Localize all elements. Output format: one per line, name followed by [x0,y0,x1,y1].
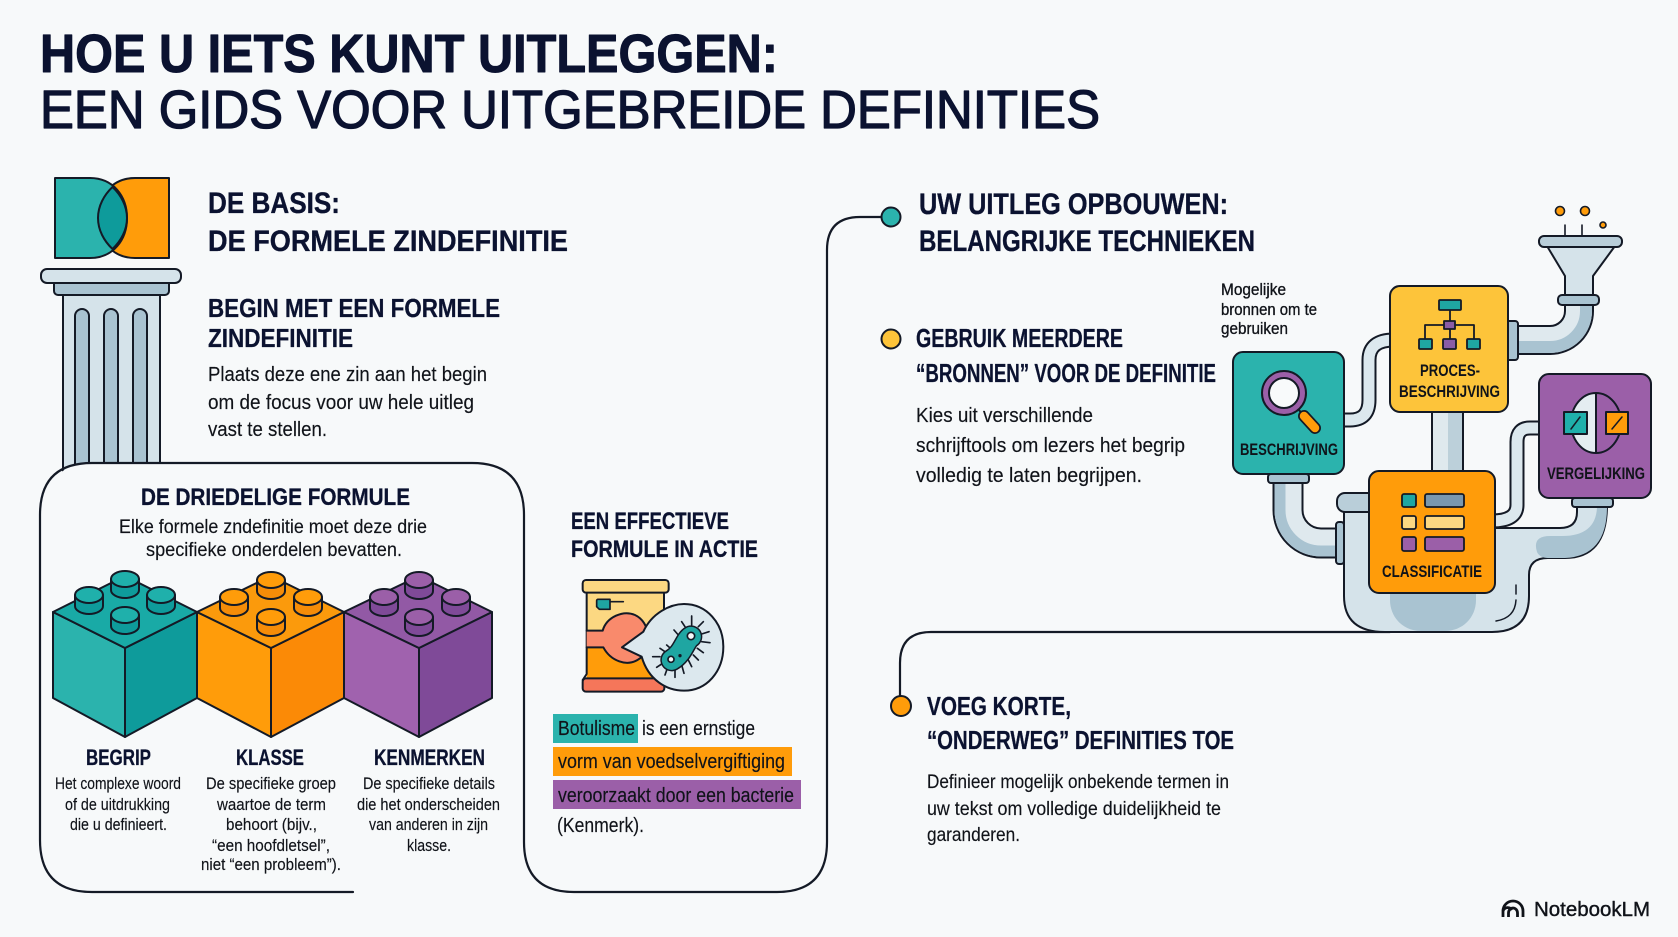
highlighted sentence: is een ernstige [642,717,755,740]
pipe: comparison to classification [1492,428,1542,521]
annotation: mogelijke bronnen [1221,281,1317,338]
icon: orange brick [197,572,344,737]
marker: orange dot [891,696,911,716]
text block: begin met een formele zindefinitie: om de focus voor uw hele uitleg [208,391,474,414]
heading: de driedelige formule: DE DRIEDELIGE FORMULE [141,484,410,511]
icon: purple brick [344,572,492,737]
text block: begin met een formele zindefinitie: Plaats deze ene zin aan het begin [208,363,487,386]
panel outline: connector line around formula panels [40,217,882,892]
box: classificatie [1369,471,1495,593]
box: beschrijving [1233,352,1344,474]
icon: column [41,269,181,480]
box: procesbeschrijving: PROCES- [1420,362,1480,380]
highlighted sentence [553,714,801,837]
marker: yellow dot [882,330,900,348]
pipe: description to process [1340,340,1394,420]
highlight: begrip: Botulisme [558,717,635,740]
title [40,24,1100,140]
annotation: mogelijke bronnen: Mogelijke [1221,281,1286,299]
icon: flowchart [1419,300,1480,349]
text block: formula intro: Elke formele zndefinitie moet deze drie [119,517,427,538]
title: HOE U IETS KUNT UITLEGGEN: [40,24,778,84]
text block: klasse: niet “een probleem”). [201,856,341,874]
section heading: de basis: DE BASIS: [208,187,340,220]
box: beschrijving: BESCHRIJVING [1240,441,1338,459]
text block: voeg korte definities toe: garanderen. [927,824,1020,846]
pipe collars: basin [1268,474,1613,564]
text block: kenmerken [357,745,500,855]
icon: list [1402,494,1464,551]
text block: klasse: KLASSE [236,745,304,770]
icon: teal brick [53,571,197,737]
text block: voeg korte definities toe: “ONDERWEG” DEFINITIES TOE [927,725,1234,755]
text block: begrip: BEGRIP [86,745,151,770]
panel: de driedelige formule [53,484,500,874]
text block: klasse: De specifieke groep [206,775,336,793]
text block: begin met een formele zindefinitie: ZINDEFINITIE [208,323,353,353]
icon: notebooklm [1503,901,1523,917]
diagram: pipes and writing tools [900,206,1651,696]
text block: gebruik meerdere bronnen: schrijftools om lezers het begrip [916,434,1185,457]
text block: gebruik meerdere bronnen: GEBRUIK MEERDERE [916,323,1123,353]
text block: voeg korte definities toe [927,691,1234,846]
title: EEN GIDS VOOR UITGEBREIDE DEFINITIES [40,80,1100,140]
highlight: begrip [553,714,638,743]
highlighted sentence: (Kenmerk). [557,814,644,837]
text block: voeg korte definities toe: VOEG KORTE, [927,691,1071,721]
highlight: kenmerk: veroorzaakt door een bacterie [558,784,794,807]
text block: gebruik meerdere bronnen: Kies uit verschillende [916,404,1093,427]
panel: een effectieve formule in actie [553,508,801,837]
annotation: mogelijke bronnen: gebruiken [1221,320,1288,338]
box: procesbeschrijving [1390,286,1508,412]
text block: kenmerken: van anderen in zijn [369,816,488,834]
box: classificatie: CLASSIFICATIE [1382,563,1482,581]
section heading: de basis: DE FORMELE ZINDEFINITIE [208,225,568,258]
text block: begin met een formele zindefinitie: vast te stellen. [208,418,327,441]
heading: effectieve formule: EEN EFFECTIEVE [571,508,729,535]
box: vergelijking [1539,374,1651,498]
highlight: klasse: vorm van voedselvergiftiging [558,750,785,773]
icon: food can with bacterium bubble [583,580,723,692]
box: procesbeschrijving: BESCHRIJVING [1399,383,1500,401]
section heading: uw uitleg opbouwen [919,188,1255,258]
text block: begin met een formele zindefinitie [208,293,500,441]
section heading: uw uitleg opbouwen: BELANGRIJKE TECHNIEKEN [919,225,1255,258]
pipe: funnel to process box [1512,300,1586,347]
text block: kenmerken: die het onderscheiden [357,796,500,814]
icon: comparison [1564,393,1628,453]
text block: kenmerken: De specifieke details [363,775,495,793]
text block: kenmerken: KENMERKEN [374,745,485,770]
text block: kenmerken: klasse. [407,837,451,855]
heading: effectieve formule [571,508,758,563]
text block: gebruik meerdere bronnen [916,323,1216,487]
icon: funnel drops [1556,206,1606,236]
basin [1344,503,1607,632]
section heading: de basis [208,187,568,258]
text block: begrip: die u definieert. [70,816,167,834]
text block: gebruik meerdere bronnen: “BRONNEN” VOOR DE DEFINITIE [916,358,1216,388]
text block: formula intro [119,517,427,561]
section heading: uw uitleg opbouwen: UW UITLEG OPBOUWEN: [919,188,1228,221]
text block: begrip [55,745,181,834]
pipe collar: process box [1506,321,1518,360]
annotation: mogelijke bronnen: bronnen om te [1221,301,1317,319]
connector line to basin [900,632,1390,696]
icon: magnifier [1262,371,1315,428]
text block: begrip: of de uitdrukking [65,796,170,814]
text block: klasse: “een hoofdletsel”, [212,837,330,855]
text block: begrip: Het complexe woord [55,775,181,793]
marker: teal dot [882,208,900,226]
box: vergelijking: VERGELIJKING [1547,465,1645,483]
text block: voeg korte definities toe: uw tekst om volledige duidelijkheid te [927,798,1221,820]
pipe: process to classification [1432,410,1463,474]
logo: NotebookLM: NotebookLM [1534,899,1650,921]
text block: voeg korte definities toe: Definieer mogelijk onbekende termen in [927,771,1229,793]
heading: effectieve formule: FORMULE IN ACTIE [571,536,758,563]
pipe: description to basin [1280,480,1340,551]
text block: begin met een formele zindefinitie: BEGIN MET EEN FORMELE [208,293,500,323]
text block: klasse: waartoe de term [216,796,326,814]
text block: gebruik meerdere bronnen: volledig te laten begrijpen. [916,464,1142,487]
panel background: formula [40,463,524,892]
text block: formula intro: specifieke onderdelen bevatten. [146,540,402,561]
text block: klasse [201,745,341,874]
icon: overlapping definition shapes [55,178,169,258]
icon: funnel [1539,236,1622,305]
text block: klasse: behoort (bijv., [226,816,317,834]
